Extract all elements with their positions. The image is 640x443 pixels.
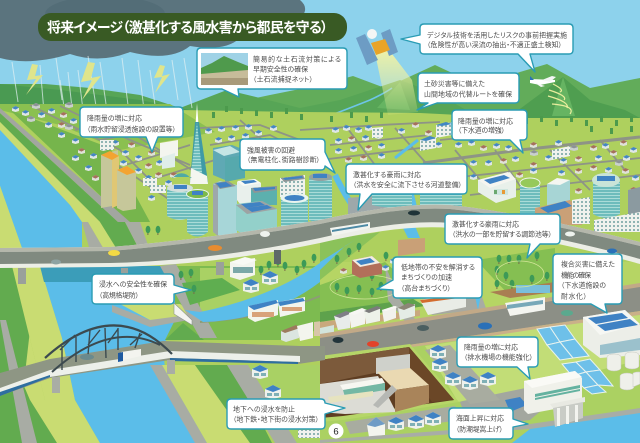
callout: river channel: （洪水を安全に流下させる河道整備）	[353, 180, 462, 189]
callout: compound disaster: 機能の確保	[561, 270, 591, 280]
title banner: 将来イメージ（激甚化する風水害から都民を守る）	[47, 20, 328, 36]
right city buildings	[478, 172, 640, 232]
elevated highway	[0, 205, 640, 268]
callout: super levee	[92, 274, 191, 304]
callout: compound disaster	[553, 254, 622, 313]
highway piers	[18, 250, 608, 284]
callout: debris flow net: 簡易的な土石流対策による	[253, 54, 341, 64]
callout: super levee: （高規格堤防）	[99, 290, 139, 300]
callout: digital technology	[401, 24, 573, 72]
trees and houses above bridge	[146, 226, 330, 438]
callout: river channel	[346, 164, 467, 210]
lower left ground between highway and bridge	[0, 264, 330, 443]
bridge vehicles	[80, 349, 141, 362]
flood gate	[174, 303, 192, 325]
mid buildings	[320, 238, 530, 338]
treatment plant with solar roof	[583, 310, 640, 358]
callout: debris flow net: （土石流捕捉ネット）	[253, 74, 313, 84]
callout: rainwater storage: （雨水貯留浸透施設の設置等）	[87, 124, 176, 134]
callout: sewer upgrade: 降雨量の増に対応	[458, 116, 513, 126]
neighbourhood road grid	[30, 105, 640, 200]
park trees	[330, 243, 549, 299]
callout: regulating reservoir: 激甚化する豪雨に対応	[452, 220, 519, 228]
small lower houses	[367, 345, 527, 437]
callout: debris flow net	[197, 48, 347, 97]
dome	[172, 173, 192, 178]
apartment blocks: upper area	[100, 122, 570, 193]
page number: 6	[333, 426, 339, 438]
landmark tower	[190, 103, 208, 184]
callout: drainage pump: 降雨量の増に対応	[464, 342, 518, 352]
page number	[328, 424, 344, 438]
callout: high ground: （高台まちづくり）	[401, 284, 451, 292]
underground station pit	[320, 344, 459, 422]
lower right ground	[320, 315, 640, 440]
callout: wind damage	[240, 139, 335, 173]
callout: compound disaster: 耐水化）	[561, 292, 587, 300]
callout: sewer upgrade	[452, 110, 527, 153]
callout: regulating reservoir	[445, 214, 560, 258]
central city buildings	[167, 145, 412, 236]
title banner	[38, 13, 347, 41]
callout: drainage pump: （排水機場の機能強化）	[464, 352, 533, 362]
callout: digital technology: デジタル技術を活用したリスクの事前把握実施	[427, 30, 567, 40]
callout: underground flooding: 地下への浸水を防止	[233, 404, 295, 414]
callout: underground flooding: （地下鉄・地下街の浸水対策）	[233, 414, 319, 424]
river-channel cylinders	[372, 188, 462, 208]
small houses: upper left	[12, 102, 177, 201]
callout: high ground	[377, 257, 482, 298]
callout: alternate route: 土砂災害等に備えた	[424, 79, 485, 88]
airplane with radar waves	[530, 76, 571, 114]
bridge deck	[0, 341, 325, 396]
mountain stream	[300, 88, 392, 127]
callout: debris flow net: 早期安全性の確保	[253, 64, 308, 74]
callout: wind damage: （無電柱化、街路樹診断）	[247, 155, 320, 164]
callout: sewer upgrade: （下水道の増強）	[458, 126, 505, 134]
lower middle parks and district	[320, 212, 640, 345]
callout: regulating reservoir: （洪水の一部を貯留する調節池等）	[452, 230, 552, 238]
callout: rainwater storage	[80, 107, 183, 152]
ground	[0, 105, 640, 443]
mountains back	[200, 64, 640, 130]
callout: sea level	[449, 408, 528, 439]
callout: sea level: （防潮堤嵩上げ）	[456, 424, 503, 434]
mountains front	[0, 77, 640, 128]
quay and sea	[320, 408, 640, 443]
tree dots on hillfoot	[212, 106, 633, 134]
callout: alternate route	[417, 73, 519, 110]
storage tanks	[607, 352, 640, 390]
callout: high ground: 低地帯の不安を解消する	[401, 262, 475, 272]
rain streaks	[12, 56, 192, 120]
callout: rainwater storage: 降雨量の増に対応	[87, 114, 142, 122]
callout: super levee: 浸水への安全性を確保	[99, 280, 167, 288]
callout: underground flooding	[227, 399, 345, 429]
pump station	[524, 371, 585, 427]
storm cloud	[0, 0, 305, 61]
callout: compound disaster: （下水道施設の	[561, 280, 606, 290]
highway vehicles	[51, 210, 617, 264]
small houses: upper centre	[205, 122, 442, 163]
bridge arch	[45, 325, 172, 372]
small houses: right	[455, 140, 639, 194]
left levee and river banks	[0, 108, 150, 251]
reservoir pools	[537, 325, 613, 394]
lower road with cars and tram	[320, 283, 640, 362]
callout: wind damage: 強風被害の回避	[247, 146, 295, 154]
callout: drainage pump	[457, 337, 538, 379]
small river through city	[335, 140, 418, 222]
satellite	[356, 29, 418, 115]
callout: sea level: 海面上昇に対応	[456, 414, 504, 422]
callout: alternate route: 山間地域の代替ルートを確保	[424, 90, 512, 98]
lightning bolts	[26, 62, 170, 100]
orange-topped towers	[101, 150, 136, 211]
callout: river channel: 激甚化する豪雨に対応	[353, 170, 421, 179]
callout: high ground: まちづくりの加速	[401, 272, 452, 282]
callout: digital technology: （危険性が高い渓流の抽出・不適正盛土検知）	[427, 40, 562, 49]
tributary	[185, 263, 320, 322]
callout: compound disaster: 複合災害に備えた	[561, 260, 615, 268]
